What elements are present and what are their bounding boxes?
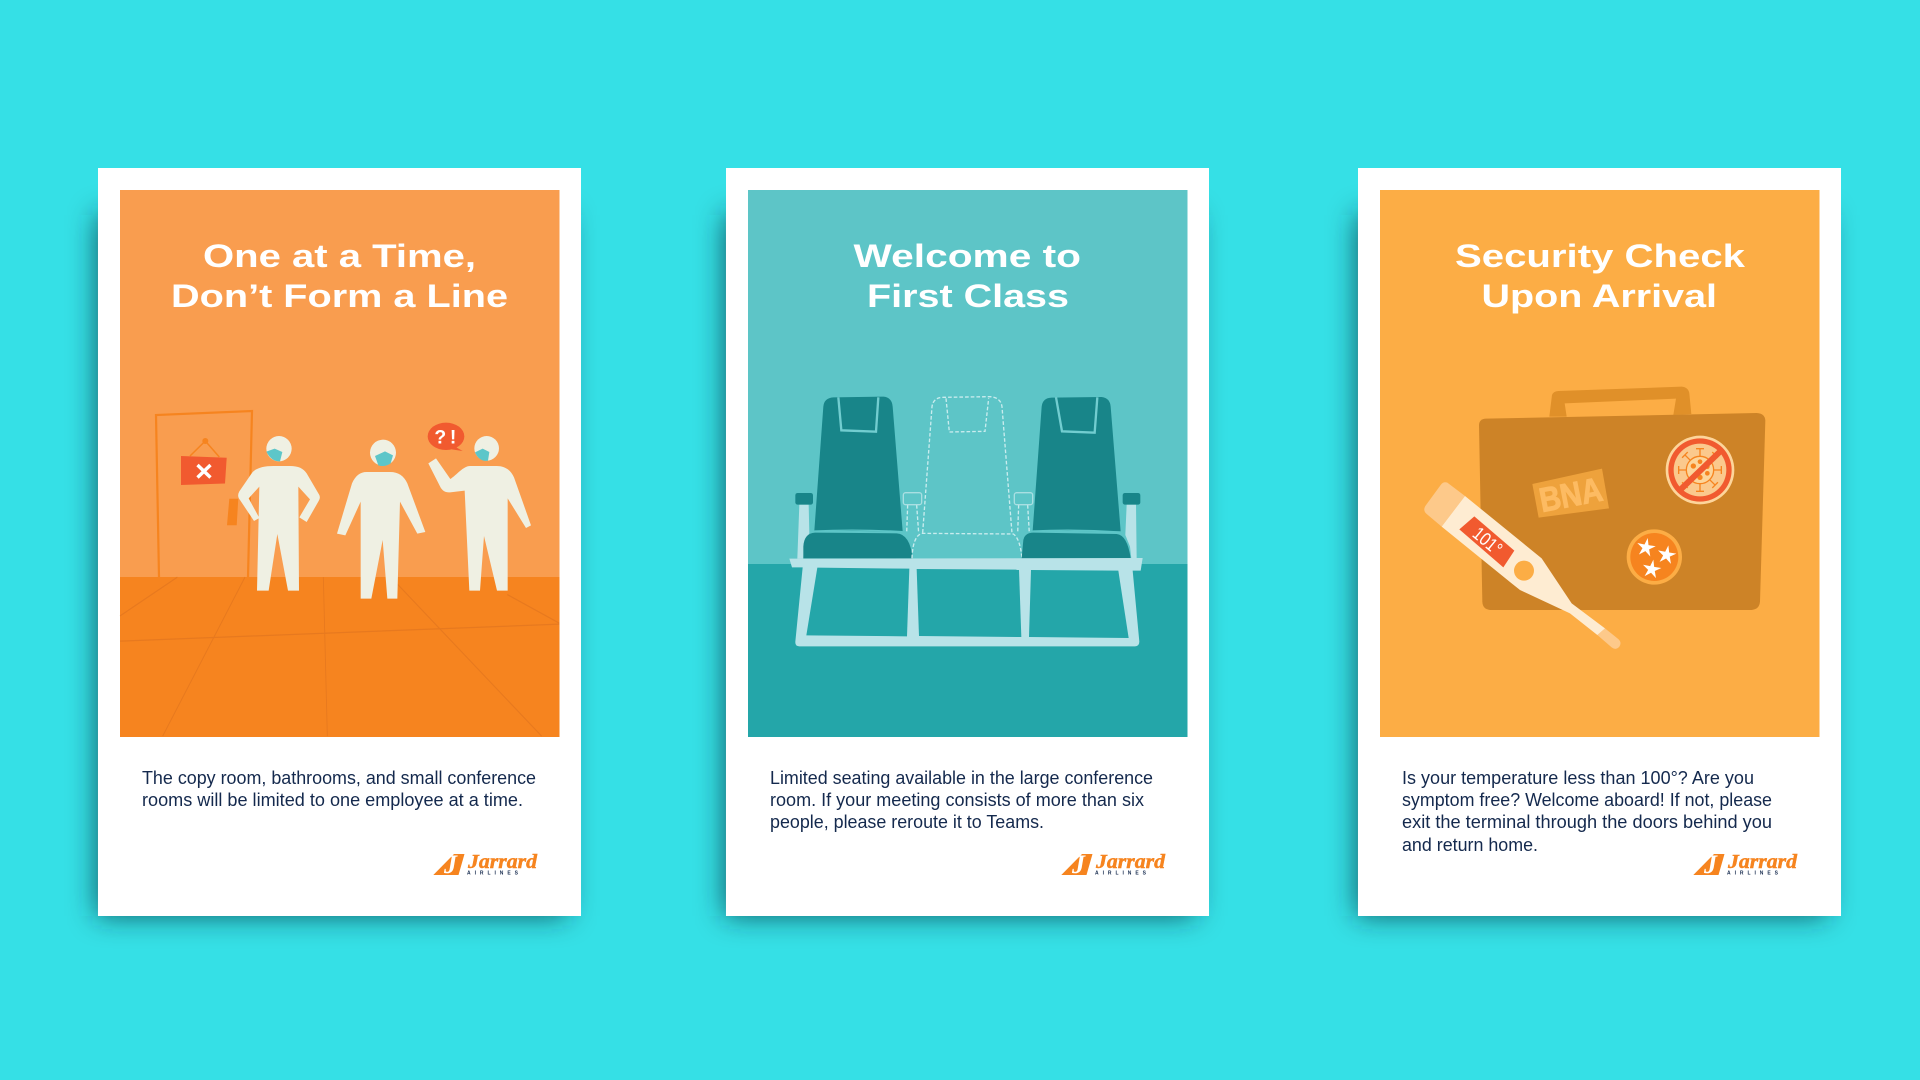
panel: poster first class — [725, 168, 1209, 916]
title: Upon Arrival — [1482, 278, 1717, 314]
logo: Jarrard — [467, 851, 538, 873]
title: One at a Time, — [203, 238, 476, 274]
left seat — [795, 397, 913, 559]
illustration background — [1380, 190, 1820, 737]
body text: and return home. — [1402, 835, 1538, 855]
title: Welcome to — [854, 238, 1081, 274]
speech bubble: ?! — [434, 427, 456, 448]
title — [1455, 238, 1745, 314]
closed sign — [181, 438, 227, 485]
speech bubble — [428, 423, 464, 451]
body text: symptom free? Welcome aboard! If not, please — [1402, 790, 1772, 810]
seats illustration — [789, 397, 1143, 646]
logo: J — [443, 850, 458, 879]
logo — [1693, 850, 1798, 879]
panel: poster one at a time — [97, 168, 581, 916]
logo: Jarrard — [1095, 851, 1166, 873]
BNA sticker: BNA — [1536, 471, 1606, 520]
no virus sticker — [1666, 436, 1734, 504]
logo: J — [1703, 850, 1718, 879]
logo: Jarrard — [1727, 851, 1798, 873]
logo — [433, 850, 538, 879]
body text: Limited seating available in the large conference — [770, 768, 1153, 788]
title: Don’t Form a Line — [171, 278, 508, 314]
illustration background: wall — [748, 190, 1188, 564]
body text: room. If your meeting consists of more than six — [770, 790, 1144, 810]
suitcase handle — [1549, 387, 1691, 417]
figures in masks — [238, 423, 531, 599]
right seat — [1022, 397, 1140, 559]
illustration background: wall — [120, 190, 560, 577]
thermometer: 101° — [1469, 523, 1507, 559]
door — [156, 411, 252, 577]
three stars sticker — [1627, 529, 1682, 585]
body text — [770, 768, 1153, 832]
figure left — [238, 436, 320, 591]
illustration background: floor — [120, 577, 559, 737]
body text: Is your temperature less than 100°? Are you — [1402, 768, 1754, 788]
logo — [1061, 850, 1166, 879]
seat frame — [789, 558, 1143, 646]
title — [854, 238, 1081, 314]
title: First Class — [867, 278, 1069, 314]
suitcase illustration — [1424, 387, 1765, 649]
body text: The copy room, bathrooms, and small conference — [142, 768, 536, 788]
body text: rooms will be limited to one employee at a time. — [142, 790, 523, 810]
logo: J — [1071, 850, 1086, 879]
body text — [142, 768, 536, 810]
body text — [1402, 768, 1772, 855]
logo: AIRLINES — [1727, 870, 1779, 876]
figure middle — [337, 440, 425, 599]
empty middle seat, dashed — [903, 397, 1033, 558]
body text: exit the terminal through the doors behind you — [1402, 812, 1772, 832]
figure right — [428, 436, 531, 591]
illustration background: floor — [748, 564, 1188, 737]
title: Security Check — [1455, 238, 1745, 274]
thermometer — [1424, 482, 1621, 649]
suitcase body — [1479, 413, 1765, 610]
body text: people, please reroute it to Teams. — [770, 812, 1044, 832]
title — [171, 238, 508, 314]
logo: AIRLINES — [467, 870, 519, 876]
logo: AIRLINES — [1095, 870, 1147, 876]
panel: poster security check — [1357, 168, 1841, 916]
door handle — [227, 499, 238, 525]
